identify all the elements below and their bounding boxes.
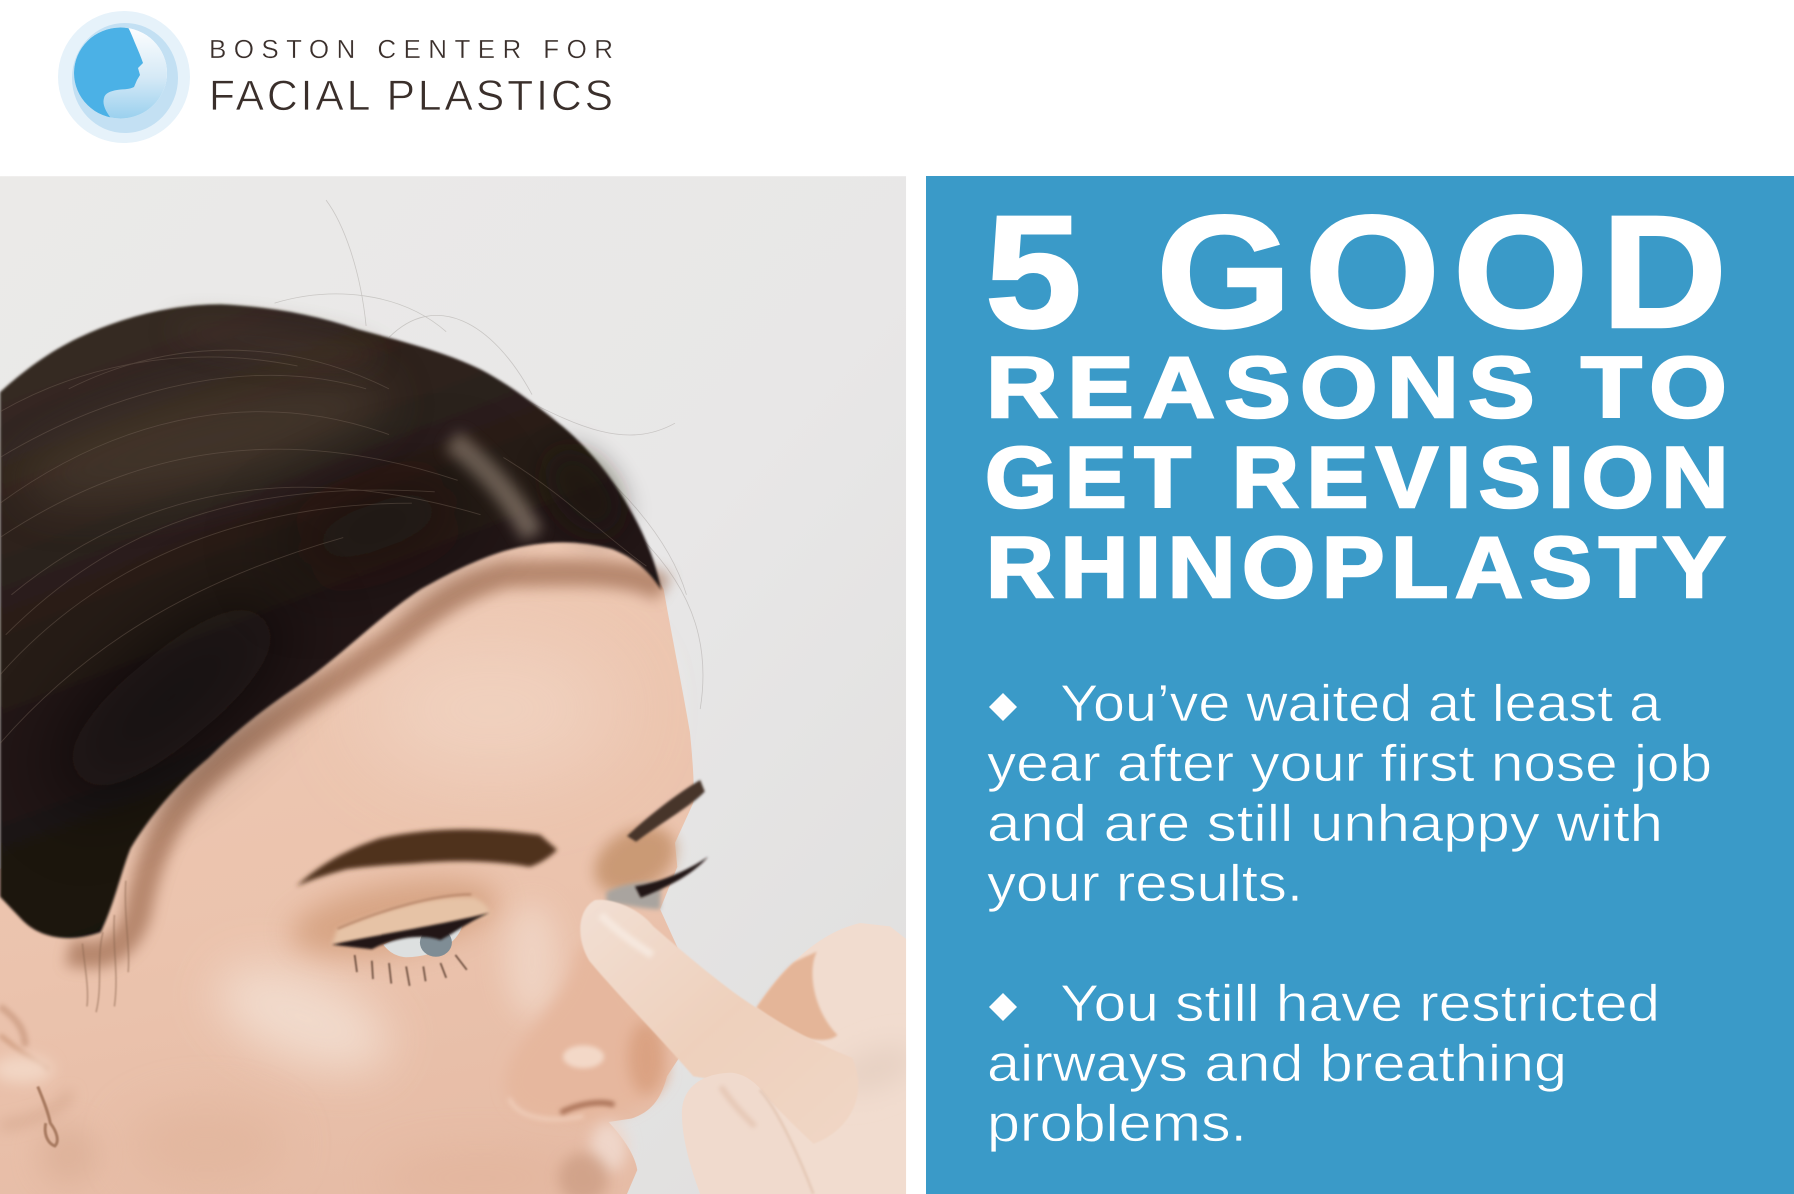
- hair: [0, 304, 664, 1012]
- nose bridge highlight: [505, 904, 559, 1018]
- title line: REASONS TO: REASONS TO: [986, 340, 1736, 436]
- sclera: [384, 926, 462, 958]
- reason 2: [987, 975, 1660, 1153]
- middle finger shadow: [756, 952, 837, 1040]
- reason 1: [987, 675, 1712, 913]
- ear: [0, 1006, 98, 1185]
- forehead highlight: [394, 651, 590, 772]
- reason 1: and are still unhappy with: [987, 795, 1663, 853]
- eye socket shading: [285, 865, 504, 969]
- earring: [38, 1087, 57, 1146]
- index finger: [580, 900, 858, 1144]
- eye near: [332, 894, 490, 986]
- thumb: [682, 1073, 790, 1194]
- cheek highlight: [210, 952, 398, 1084]
- iris: [420, 934, 452, 957]
- reason 1: your results.: [987, 855, 1303, 913]
- nose: [505, 938, 667, 1121]
- reason 2: airways and breathing: [987, 1035, 1567, 1093]
- lips shadow: [558, 1153, 609, 1194]
- eyebrow near: [296, 829, 557, 886]
- logo line 2: FACIAL PLASTICS: [209, 73, 613, 120]
- icon: face profile in circle: [58, 11, 190, 143]
- face skin: [0, 526, 698, 1194]
- flyaway hairs: [275, 200, 703, 709]
- hair sheen: [38, 376, 376, 504]
- reason 2: You still have restricted: [1060, 975, 1660, 1033]
- panel: blue text panel: [926, 176, 1794, 1194]
- reason 1: You’ve waited at least a: [1060, 675, 1661, 733]
- logo: Boston Center for Facial Plastics: [58, 11, 613, 143]
- eyebrow far: [627, 780, 705, 842]
- title line: 5 GOOD: 5 GOOD: [985, 182, 1740, 361]
- back of hand shading: [857, 1056, 896, 1082]
- upper lip highlight: [590, 1122, 627, 1172]
- bullet diamond: [989, 993, 1017, 1021]
- lower lashes: [355, 955, 467, 986]
- title line: RHINOPLASTY: RHINOPLASTY: [986, 520, 1732, 616]
- hand back: [773, 923, 906, 1194]
- upper lashes: [332, 913, 490, 949]
- eyelid: [332, 897, 490, 945]
- logo line 1: BOSTON CENTER FOR: [209, 34, 613, 64]
- fingertip highlights: [601, 915, 652, 955]
- eye far: [606, 857, 708, 909]
- bullet diamond: [989, 693, 1017, 721]
- cheek and jaw shading: [174, 1130, 236, 1156]
- reason 1: year after your first nose job: [987, 735, 1712, 793]
- part line: [452, 440, 533, 535]
- reason 2: problems.: [987, 1095, 1247, 1153]
- wisps near ear: [82, 881, 129, 1012]
- title: [985, 182, 1740, 616]
- panel: photo of woman's nose being examined: [0, 176, 920, 1194]
- hair strands: [0, 350, 646, 743]
- title line: GET REVISION: GET REVISION: [985, 430, 1736, 526]
- brown hairline fuzz: [69, 573, 664, 955]
- gloved hand: [580, 900, 920, 1194]
